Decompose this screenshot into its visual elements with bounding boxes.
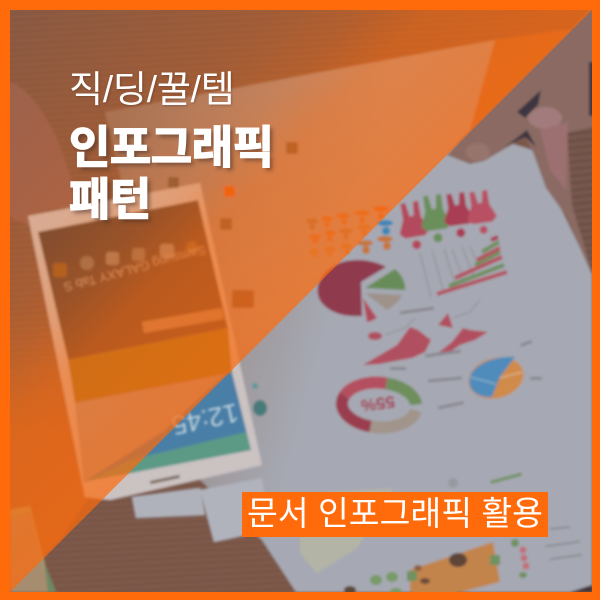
ring chart: [340, 380, 417, 430]
heading: main title: 인포그래픽: [69, 122, 274, 173]
small wifi-like icons: [306, 206, 393, 258]
phone home bar: [150, 475, 180, 484]
large pie chart: [318, 260, 405, 322]
bottom-right corner: [570, 585, 592, 592]
white bar on phone screen: [142, 308, 224, 333]
heading: small title: 직/딩/꿀/템: [69, 69, 235, 110]
app icons: [53, 241, 198, 277]
phone: [28, 183, 262, 500]
ring percentage text: 55%: [360, 392, 396, 415]
left side lighter wood: [10, 349, 87, 554]
notebook bottom-left: [10, 506, 46, 572]
bottom orange panel: [410, 542, 500, 600]
world map: [363, 300, 488, 370]
loose sheets: [132, 488, 205, 518]
heading: main title: [69, 122, 275, 225]
bar chart: [420, 237, 507, 297]
blue and orange pie chart: [467, 356, 525, 400]
yellow sheet: [300, 488, 393, 573]
label: document infographic use: 문서 인포그래픽 활용: [247, 496, 543, 533]
phone tablet name: Samsung GALAXY Tab S: [62, 242, 208, 295]
phone clock: 12:45: [169, 397, 241, 441]
top-right table area: [472, 30, 568, 126]
people icons: [394, 189, 499, 252]
blue pie labels: [428, 340, 542, 409]
small green icon near phone: [252, 383, 267, 416]
right hand: [447, 10, 592, 274]
left hand: [10, 82, 73, 224]
heading: main title: 패턴: [69, 174, 151, 225]
main paper: [105, 40, 592, 592]
panel dots and legend: [344, 473, 582, 596]
small icons on paper: [168, 142, 298, 308]
